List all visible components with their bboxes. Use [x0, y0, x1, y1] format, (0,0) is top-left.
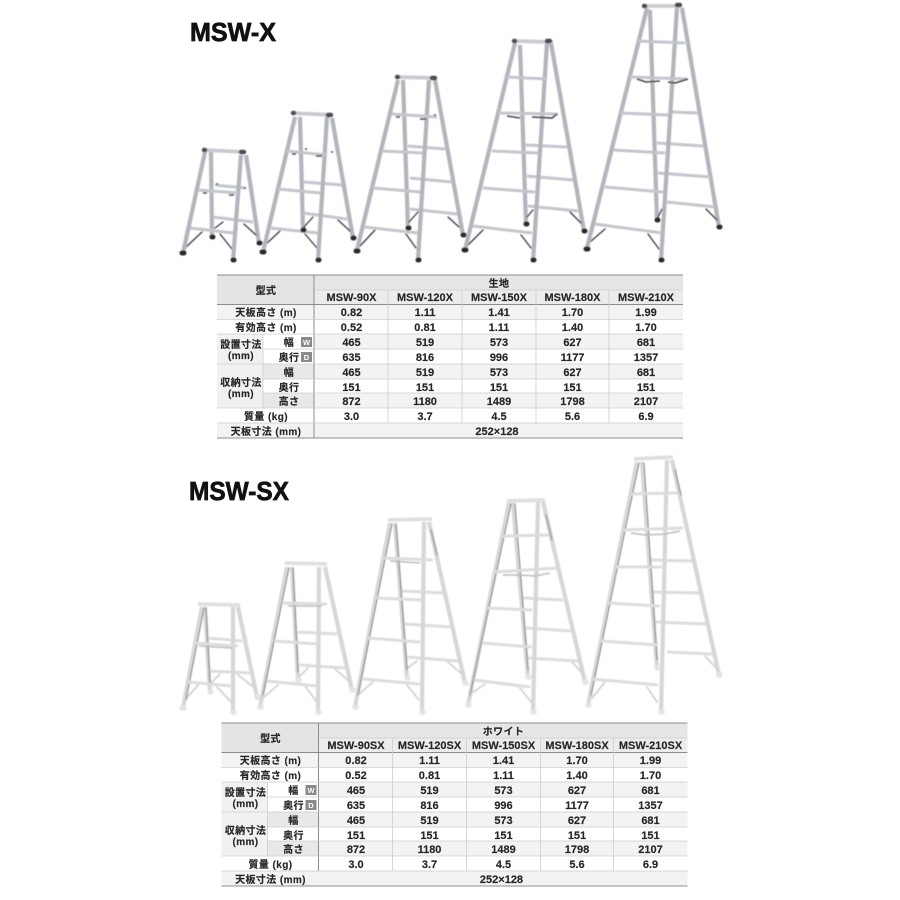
- table values: 151: [641, 830, 660, 842]
- row labels: 有効高さ (m): [235, 321, 297, 334]
- table values: 252×128: [480, 874, 523, 886]
- table values: 1798: [565, 844, 589, 856]
- row labels: 幅: [288, 784, 299, 797]
- table header: ホワイト: [483, 726, 524, 738]
- table values: 681: [637, 367, 655, 379]
- table: MSW-SX specifications: [222, 723, 688, 886]
- table values: 681: [637, 337, 655, 349]
- row labels: 設置寸法: [220, 338, 262, 351]
- table values: 1.11: [493, 770, 514, 782]
- table values: 2107: [634, 396, 658, 408]
- table header: MSW-180SX: [545, 740, 609, 752]
- table header: [260, 726, 683, 752]
- row labels: [220, 306, 312, 438]
- table values: 627: [563, 367, 582, 379]
- row labels: (mm): [232, 837, 259, 848]
- ladder: MSW-120X: [262, 113, 354, 260]
- table values: 573: [494, 815, 513, 827]
- table values: 6.9: [643, 859, 658, 871]
- row labels: (mm): [228, 389, 254, 400]
- table values: 681: [641, 785, 660, 797]
- table values: 151: [342, 382, 361, 394]
- table header: 型式: [260, 732, 281, 745]
- table header: MSW-150X: [471, 292, 528, 304]
- row labels: 質量 (kg): [249, 858, 292, 871]
- table values: 1177: [561, 352, 584, 364]
- table values: 6.9: [638, 411, 654, 423]
- row labels: 天板寸法 (mm): [231, 425, 301, 438]
- ladder: MSW-180SX: [468, 500, 586, 713]
- row labels: 設置寸法: [225, 786, 266, 799]
- table values: 465: [342, 337, 361, 349]
- ladder: MSW-210SX: [588, 457, 720, 713]
- ladder: MSW-150X: [356, 77, 464, 260]
- table values: 0.81: [419, 770, 440, 782]
- table header: MSW-210SX: [619, 740, 683, 752]
- table values: 151: [420, 830, 439, 842]
- table header: MSW-180X: [544, 292, 601, 304]
- table values: 252×128: [475, 426, 519, 438]
- ladder: MSW-180X: [464, 41, 585, 262]
- table values: 1180: [418, 844, 441, 856]
- table values: 151: [494, 830, 513, 842]
- table values: 635: [342, 352, 361, 364]
- table values: 2107: [638, 844, 663, 856]
- table values: [345, 755, 663, 886]
- table values: 573: [494, 785, 513, 797]
- table values: 465: [342, 367, 361, 379]
- table values: 465: [347, 785, 365, 797]
- table values: 1.40: [566, 770, 588, 782]
- table values: 1357: [638, 800, 663, 812]
- table values: 872: [342, 396, 361, 408]
- ladder: MSW-210X: [586, 5, 720, 260]
- table values: 1.11: [415, 307, 435, 319]
- row labels: 質量 (kg): [244, 410, 288, 423]
- row labels: 高さ: [279, 395, 299, 408]
- table values: 151: [416, 382, 434, 394]
- row labels: 天板高さ (m): [235, 306, 297, 319]
- row labels: (mm): [232, 799, 259, 810]
- table values: 681: [641, 815, 660, 827]
- row labels: 天板寸法 (mm): [235, 873, 306, 886]
- row labels: 収納寸法: [220, 376, 262, 389]
- table values: 0.82: [341, 307, 362, 319]
- table values: 4.5: [491, 411, 507, 423]
- table values: 151: [637, 382, 655, 394]
- ladder: MSW-90X: [182, 150, 260, 261]
- row labels: D: [304, 353, 310, 362]
- table values: 519: [420, 785, 439, 797]
- table values: 627: [563, 337, 582, 349]
- table header: MSW-150SX: [472, 740, 536, 752]
- table values: 1.41: [488, 307, 510, 319]
- ladder: MSW-90SX: [182, 604, 258, 713]
- table values: 3.7: [422, 859, 437, 871]
- row labels: [225, 754, 316, 886]
- row labels: 収納寸法: [225, 824, 266, 837]
- table values: 4.5: [496, 859, 511, 871]
- table cell backgrounds: [222, 723, 688, 886]
- table values: 151: [347, 830, 365, 842]
- table values: 573: [490, 337, 508, 349]
- table values: [341, 307, 658, 438]
- row labels: 幅: [284, 336, 294, 349]
- table header: MSW-90X: [327, 292, 377, 304]
- table header: 生地: [489, 277, 509, 290]
- heading: MSW-SX: MSW-SX: [189, 476, 290, 506]
- row labels: W: [307, 786, 315, 795]
- table values: 635: [347, 800, 365, 812]
- table values: 1.70: [562, 307, 583, 319]
- table values: 1.70: [566, 755, 588, 767]
- ladders: MSW-X series: [182, 5, 720, 262]
- table values: 816: [420, 800, 439, 812]
- row labels: 奥行: [283, 829, 304, 842]
- table values: 465: [347, 815, 365, 827]
- row labels: 高さ: [283, 843, 304, 856]
- row labels: 幅: [288, 814, 299, 827]
- table values: 0.52: [341, 322, 362, 334]
- table values: 3.7: [417, 411, 433, 423]
- table values: 519: [416, 367, 434, 379]
- table header: MSW-210X: [618, 292, 675, 304]
- table header: [256, 277, 675, 304]
- table header: MSW-120SX: [398, 740, 462, 752]
- table values: 1798: [560, 396, 585, 408]
- table values: 5.6: [565, 411, 580, 423]
- table values: 996: [494, 800, 513, 812]
- row labels: 奥行: [279, 351, 299, 364]
- table values: 1.40: [562, 322, 583, 334]
- table values: 151: [563, 382, 582, 394]
- heading: MSW-X: MSW-X: [190, 17, 277, 47]
- table values: 1.41: [493, 755, 514, 767]
- table values: 519: [416, 337, 434, 349]
- table values: 1.70: [640, 770, 661, 782]
- row labels: 奥行: [283, 799, 304, 812]
- ladder: MSW-150SX: [355, 519, 466, 713]
- ladders: MSW-SX series: [182, 457, 720, 713]
- table values: 1357: [634, 352, 658, 364]
- table values: 1.99: [635, 307, 657, 319]
- table values: 3.0: [348, 859, 364, 871]
- table values: 0.81: [414, 322, 436, 334]
- table values: 0.82: [345, 755, 367, 767]
- table values: 627: [568, 785, 586, 797]
- table values: 872: [347, 844, 365, 856]
- table values: 1489: [491, 844, 516, 856]
- row labels: 奥行: [279, 381, 299, 394]
- table values: 1177: [565, 800, 589, 812]
- table values: 5.6: [569, 859, 585, 871]
- row labels: (mm): [228, 351, 254, 362]
- table values: 816: [416, 352, 434, 364]
- table values: 627: [568, 815, 586, 827]
- row labels: 幅: [284, 366, 294, 379]
- table values: 151: [490, 382, 508, 394]
- table values: 1.70: [635, 322, 657, 334]
- table values: 519: [420, 815, 439, 827]
- table header: MSW-90SX: [327, 740, 385, 752]
- table cell backgrounds: [217, 275, 683, 438]
- table values: 996: [490, 352, 508, 364]
- table header: MSW-120X: [397, 292, 454, 304]
- table values: 0.52: [345, 770, 367, 782]
- table values: 3.0: [344, 411, 359, 423]
- table values: 1.11: [489, 322, 509, 334]
- table values: 1489: [487, 396, 511, 408]
- row labels: 天板高さ (m): [240, 754, 301, 767]
- row labels: W: [303, 338, 311, 347]
- table values: 151: [568, 830, 586, 842]
- row labels: 有効高さ (m): [240, 769, 301, 782]
- table values: 1.99: [640, 755, 661, 767]
- row labels: D: [308, 801, 314, 810]
- table values: 1180: [413, 396, 437, 408]
- table header: 型式: [256, 284, 276, 297]
- ladder: MSW-120SX: [260, 563, 353, 713]
- table values: 1.11: [419, 755, 440, 767]
- table: MSW-X specifications: [217, 275, 683, 438]
- table values: 573: [490, 367, 508, 379]
